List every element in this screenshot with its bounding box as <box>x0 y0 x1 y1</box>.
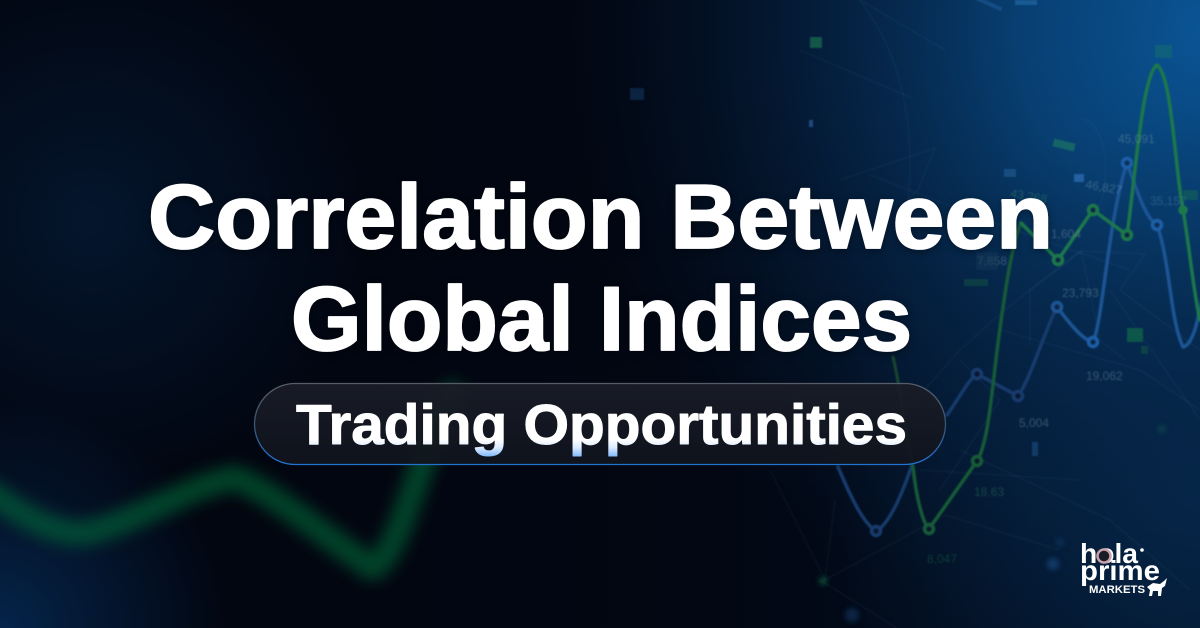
chart number labels: 23,793 <box>1062 286 1099 300</box>
logo: hola prime markets: MARKETS <box>1089 584 1145 596</box>
title <box>148 167 1053 370</box>
subtitle pill <box>254 384 946 464</box>
logo: hola prime markets: hola <box>1080 538 1138 569</box>
network grid lines <box>770 0 1200 628</box>
title: Global Indices <box>291 269 912 370</box>
chart number labels: 18.63 <box>974 485 1004 499</box>
title: Correlation Between <box>148 167 1053 268</box>
chart number labels: 43,268 <box>1009 186 1048 206</box>
chart number labels: 45,091 <box>1118 132 1155 146</box>
logo: hola prime markets: prime <box>1080 555 1160 586</box>
chart number labels: 19,062 <box>1086 369 1123 383</box>
sharp green chart line <box>893 65 1200 534</box>
sharp blue chart line <box>838 158 1200 536</box>
logo: hola prime markets <box>1080 538 1167 596</box>
chart number labels: 5,004 <box>1019 416 1049 430</box>
chart number labels: 8,047 <box>927 552 957 566</box>
glowing network dots <box>819 425 1166 622</box>
small chart markers <box>630 0 1198 456</box>
chart number labels: 1,604 <box>1051 227 1081 241</box>
chart number labels: 46,827 <box>1084 177 1123 197</box>
subtitle: Trading Opportunities <box>296 393 907 457</box>
chart number labels: 35,157 <box>1150 194 1187 208</box>
blurred green chart line <box>0 395 452 568</box>
chart number labels: 7,858 <box>977 254 1007 268</box>
chart number labels <box>927 132 1187 566</box>
